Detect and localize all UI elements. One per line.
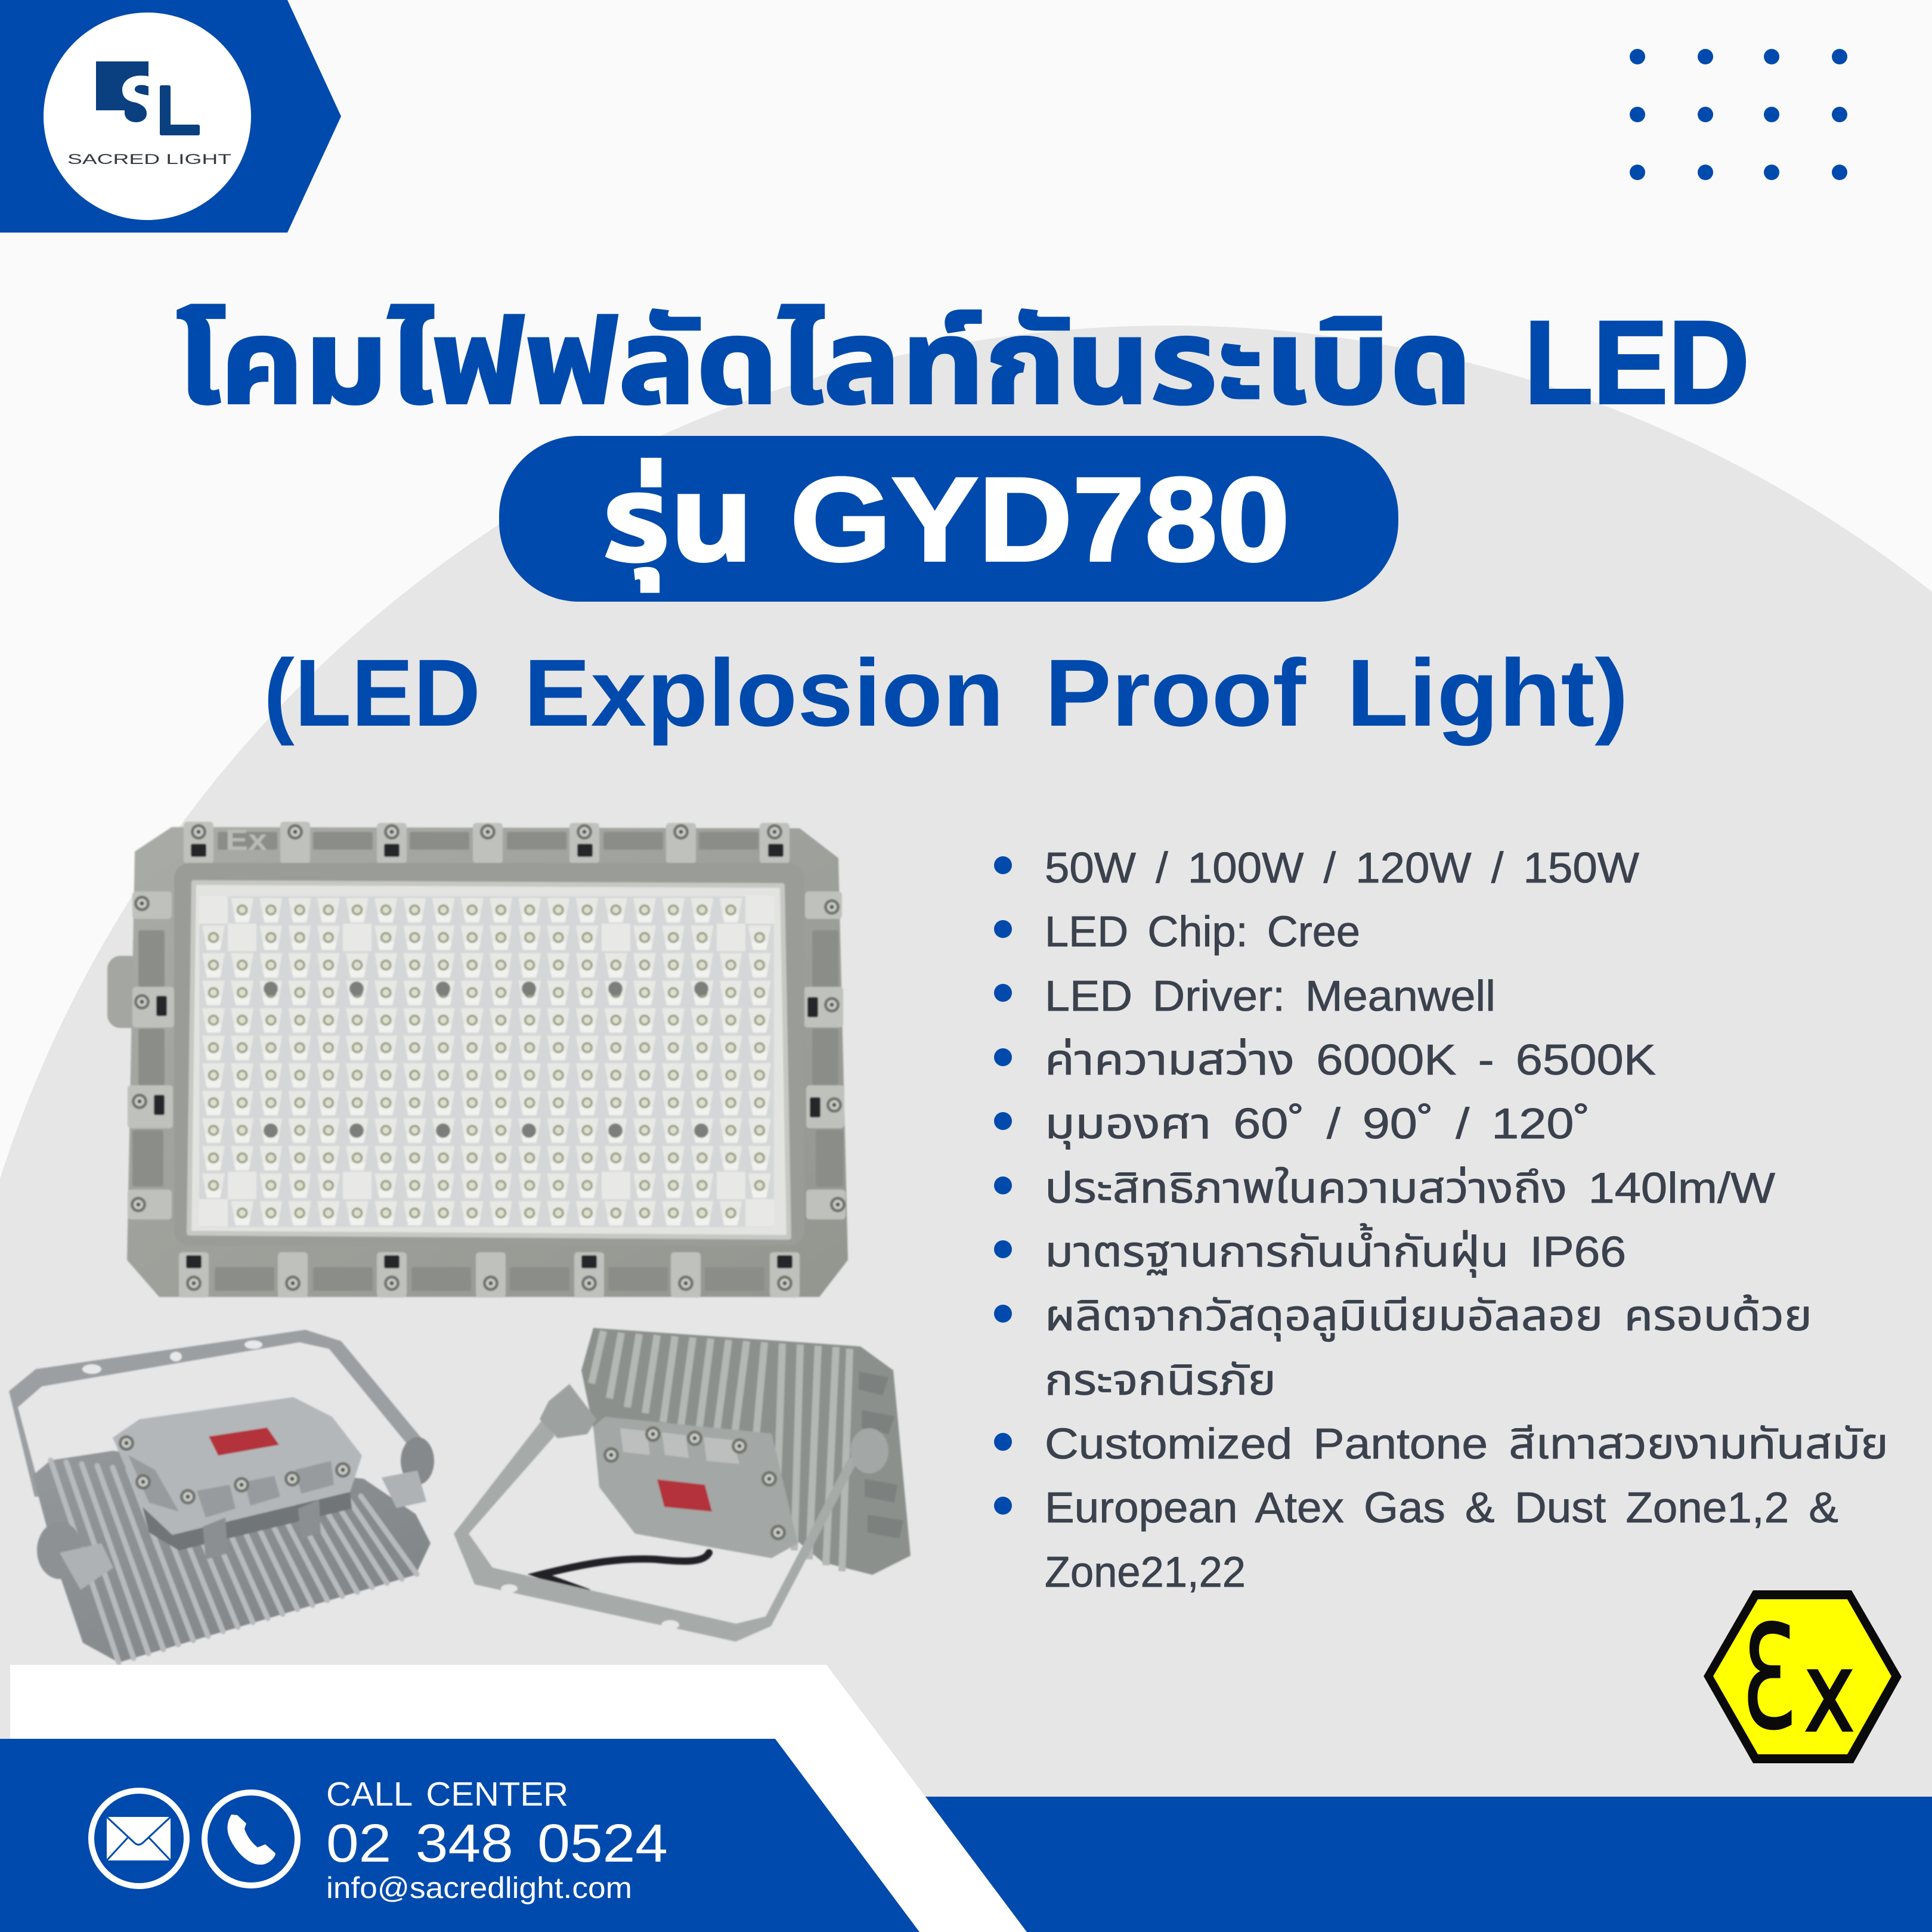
subtitle: Explosion xyxy=(524,639,1004,746)
bolts xyxy=(131,824,846,1291)
spec: material line one: ผลิตจากวัสดุอลูมิเนียมอัลลอย ครอบด้วย xyxy=(1045,1292,1812,1342)
email address: info@sacredlight.com xyxy=(326,1871,632,1905)
right plate xyxy=(382,1470,426,1508)
left plate xyxy=(60,1543,113,1590)
warning label xyxy=(657,1479,712,1512)
dark sensor leds xyxy=(264,982,708,1138)
side gland xyxy=(107,956,143,1028)
cable xyxy=(540,1553,709,1592)
mounting lugs xyxy=(128,822,846,1298)
spec: colour temperature: ค่าความสว่าง 6000K - 6500K xyxy=(1045,1036,1656,1084)
led grid xyxy=(199,896,774,1227)
driver box ribs xyxy=(128,1455,334,1518)
white angled strip xyxy=(10,1665,1027,1932)
heat sink body xyxy=(33,1451,431,1662)
decorative dot grid xyxy=(1630,49,1847,180)
bracket holes xyxy=(82,1340,262,1374)
logo mark L xyxy=(160,85,200,135)
driver box xyxy=(113,1397,362,1535)
side ribs xyxy=(859,1371,903,1538)
side recesses xyxy=(132,832,843,1291)
housing frame xyxy=(127,827,848,1297)
right pivot xyxy=(401,1437,434,1485)
driver box xyxy=(593,1417,798,1558)
spec: material line two: กระจกนิรภัย xyxy=(1045,1357,1276,1404)
spec: wattage: 50W / 100W / 120W / 150W xyxy=(1045,844,1639,892)
contact details xyxy=(326,1775,668,1905)
box feet xyxy=(203,1500,321,1559)
blue footer right xyxy=(925,1797,1932,1932)
Ex certification mark xyxy=(1704,1590,1902,1763)
heat sink fins xyxy=(51,1460,417,1662)
title: LED xyxy=(1524,296,1750,428)
subtitle: Proof xyxy=(1045,639,1306,746)
inner frame xyxy=(174,863,804,1246)
spec: colour: Customized Pantone สีเทาสวยงามทันสมัย xyxy=(1045,1420,1888,1468)
heat sink body xyxy=(581,1328,911,1575)
title: โคมไฟฟลัดไลท์กันระเบิด xyxy=(176,296,1472,428)
led blanks xyxy=(199,896,774,1227)
subtitle: (LED xyxy=(264,639,481,746)
spec: atex line two: Zone21,22 xyxy=(1045,1549,1246,1596)
warning label xyxy=(209,1428,279,1456)
spec list xyxy=(994,844,1888,1596)
spec: efficacy: ประสิทธิภาพในความสว่างถึง 140lm/W xyxy=(1045,1165,1775,1212)
spec: atex line one: European Atex Gas & Dust Zone1,2 & xyxy=(1045,1484,1838,1532)
phone number: 02 348 0524 xyxy=(326,1814,668,1874)
product photo: rear view left xyxy=(9,1330,434,1662)
icon: email xyxy=(91,1791,187,1886)
subtitle: Light) xyxy=(1346,639,1628,746)
product photo: rear view right xyxy=(454,1328,911,1642)
box bolts xyxy=(603,1426,786,1540)
spec: driver: LED Driver: Meanwell xyxy=(1045,973,1496,1020)
call center label: CALL CENTER xyxy=(326,1775,568,1813)
header arrow banner xyxy=(0,0,341,233)
mounting bracket xyxy=(9,1330,433,1497)
spec: ingress protection: มาตรฐานการกันน้ำกันฝุ่น IP66 xyxy=(1045,1223,1626,1278)
heat sink fins xyxy=(592,1331,850,1571)
box ribs xyxy=(620,1428,739,1464)
mounting bracket xyxy=(454,1419,860,1642)
black mounting holes xyxy=(154,844,821,1268)
model pill xyxy=(499,436,1398,602)
blue footer left xyxy=(0,1739,919,1932)
Ex certification mark: x xyxy=(1804,1629,1854,1757)
spec: beam angle: มุมองศา 60˚ / 90˚ / 120˚ xyxy=(1045,1100,1590,1150)
left plate xyxy=(540,1384,596,1438)
bullets xyxy=(994,856,1012,1515)
box bolts xyxy=(119,1435,351,1504)
left pivot xyxy=(37,1522,82,1579)
logo mark S xyxy=(96,61,148,122)
bracket holes xyxy=(501,1584,679,1630)
Ex certification mark: Ɛ xyxy=(1741,1594,1796,1761)
product photo: front of floodlight xyxy=(107,822,848,1298)
tray xyxy=(189,883,789,1237)
driver box shadow xyxy=(143,1492,352,1550)
embossed Ex mark: Ex xyxy=(225,825,267,856)
right pivot xyxy=(850,1428,888,1473)
icon: phone xyxy=(205,1792,298,1885)
logo badge xyxy=(44,13,251,220)
brand name: SACRED LIGHT xyxy=(67,151,232,168)
spec: chip: LED Chip: Cree xyxy=(1045,908,1360,956)
model name: รุ่น GYD780 xyxy=(602,453,1290,592)
